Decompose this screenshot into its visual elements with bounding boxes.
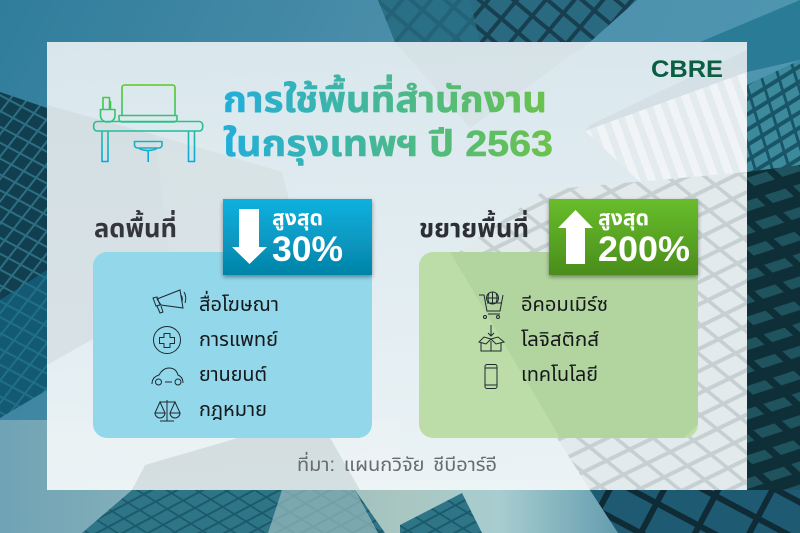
text: highest: สูงสุด	[272, 207, 323, 231]
panel: translucent white card	[47, 42, 747, 490]
text: automotive: ยานยนต์	[199, 364, 267, 386]
icon: down arrow	[232, 209, 267, 264]
source note: ที่มา: แผนกวิจัย ชีบีอาร์อี	[297, 451, 497, 476]
text: advertising: สื่อโฆษณา	[199, 290, 279, 316]
icon: parcel box	[479, 325, 504, 351]
icon: car	[152, 368, 183, 385]
icon: scales	[155, 400, 180, 421]
text: medical: การแพทย์	[199, 329, 278, 351]
icon: shopping cart with globe	[479, 292, 503, 318]
panel: expansion sectors	[419, 252, 698, 438]
panel: decrease sectors	[93, 252, 372, 438]
number: 30%: 30%	[272, 230, 343, 269]
icon: medical cross	[154, 326, 180, 354]
text: highest: สูงสุด	[598, 207, 649, 231]
text: e-commerce: อีคอมเมิร์ซ	[521, 294, 608, 316]
icon: megaphone	[153, 290, 186, 313]
title	[223, 74, 553, 165]
heading: decrease space: ลดพื้นที่	[94, 210, 177, 243]
icon: office desk	[94, 85, 203, 162]
icon: smartphone	[485, 364, 497, 388]
heading: expand space: ขยายพื้นที่	[419, 210, 529, 243]
title: การใช้พื้นที่สำนักงาน	[223, 74, 547, 120]
title: ในกรุงเทพฯ ปี 2563	[223, 123, 553, 165]
banner: up max 200%	[549, 199, 698, 275]
icon: up arrow	[558, 210, 593, 264]
number: 200%: 200%	[598, 230, 690, 269]
text: technology: เทคโนโลยี	[521, 364, 598, 386]
text: legal: กฎหมาย	[199, 399, 267, 421]
banner: down max 30%	[223, 199, 372, 275]
logo: CBRE: CBRE	[651, 56, 723, 83]
text: logistics: โลจิสติกส์	[521, 329, 599, 351]
